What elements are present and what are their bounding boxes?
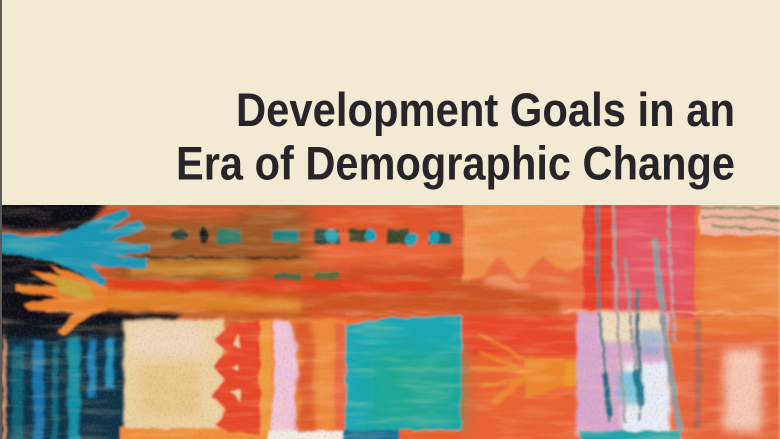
panel: right orange field (680, 195, 780, 439)
panel: light orange zigzag block (463, 195, 587, 315)
panel: pink zigzag with orange stripes (271, 320, 347, 432)
left edge line (0, 0, 2, 439)
painting (0, 195, 780, 439)
paint streak texture (105, 205, 585, 315)
panel: teal square (345, 315, 461, 430)
title (176, 83, 735, 190)
panel: red-orange upper band (100, 195, 475, 317)
cream title panel (0, 0, 780, 205)
panel: red zigzag with orange field (212, 320, 275, 435)
panel: black background behind hands (2, 205, 183, 324)
speckle texture (461, 205, 780, 439)
panel: bottom strip (268, 430, 462, 439)
panel: lower red-orange block with yellow hand (461, 315, 592, 439)
panel: cream block (120, 320, 275, 439)
icon: orange hand and arm (16, 266, 560, 336)
drips (598, 205, 699, 430)
panel: blue vertical stripes (0, 318, 125, 439)
peach seam line (345, 311, 780, 314)
panel: lilac and white dripped block (577, 312, 680, 439)
icon: blue hand and arm (0, 208, 150, 287)
icon: yellow hand (472, 335, 592, 402)
dark dabs and teal squares (128, 226, 453, 283)
panel: red dripped block (583, 195, 701, 317)
